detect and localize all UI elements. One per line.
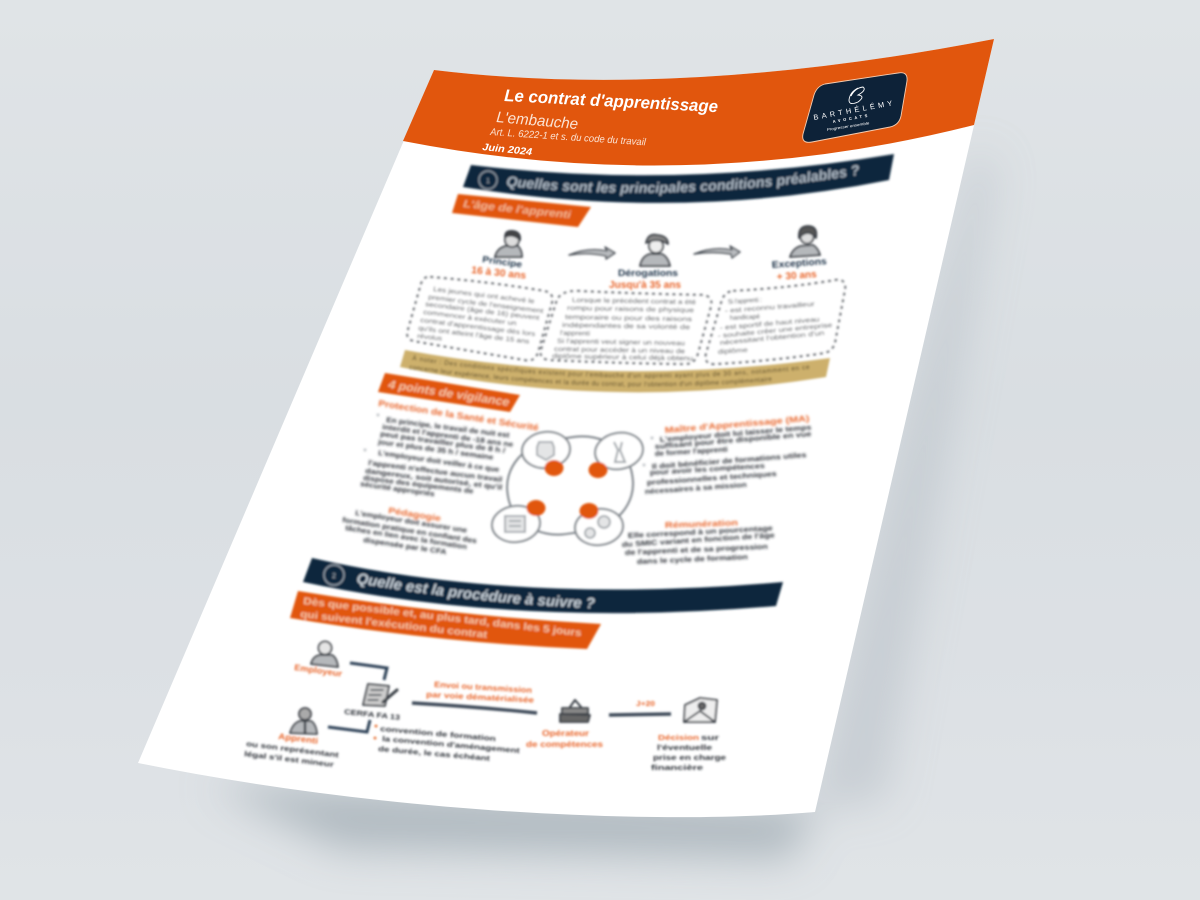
pedagogy text: L'employeur doit assurer une xyxy=(355,508,468,535)
master text xyxy=(643,423,812,496)
box principe: contrat d'apprentissage dès lors xyxy=(420,317,537,338)
box exceptions: - est sportif de haut niveau xyxy=(720,316,820,332)
range to 35: Jusqu'à 35 ans xyxy=(609,280,681,291)
subtitle: L'embauche xyxy=(496,109,579,133)
pay text: Elle correspond à un pourcentage xyxy=(628,523,773,540)
tag: deadline: qui suivent l'exécution du contrat xyxy=(300,609,489,641)
box principe: premier cycle de l'enseignement xyxy=(428,294,544,315)
box derogations: diplôme supérieur à celui déjà obtenu xyxy=(552,353,693,362)
pay text: dans le cycle de formation xyxy=(637,552,748,566)
section 2 number xyxy=(324,565,344,585)
bullet text 1: interdit et l'apprenti de -18 ans ne xyxy=(382,422,514,449)
master text: de former l'apprenti xyxy=(655,445,728,458)
arrow 2 xyxy=(694,246,740,258)
box exceptions: Si l'apprenti : xyxy=(728,297,762,306)
decision text: financière xyxy=(651,763,703,772)
apprentice note xyxy=(244,739,340,769)
decision text: Décision xyxy=(658,733,699,742)
box derogations: temporaire ou pour des raisons xyxy=(565,314,693,323)
label: transmission: Envoi ou transmission xyxy=(434,680,532,695)
age section: people and labels xyxy=(471,226,827,291)
apprentice note: légal s'il est mineur xyxy=(244,749,334,769)
gold note band: À noter : Des conditions spécifiques existent pour l'embauche d'un apprenti ayant plus de 30 ans, notamment en ce qui xyxy=(412,354,810,380)
box exceptions: handicapé xyxy=(730,313,760,322)
apprentice note: ou son représentant xyxy=(246,739,340,759)
label exceptions: Exceptions xyxy=(771,256,827,271)
pay text: de l'apprenti et de sa progression xyxy=(625,542,768,557)
icon: person principe xyxy=(495,231,522,257)
box derogations: Lorsque le précédent contrat a été xyxy=(572,297,696,306)
icon: operator xyxy=(560,700,590,722)
label: operator: Opérateur xyxy=(542,729,589,738)
logo name: BARTHÉLÉMY xyxy=(813,99,893,122)
master text: L'employeur doit lui laisser le temps xyxy=(659,423,812,444)
bullet text 1: peut pas travailler plus de 8 h / xyxy=(380,429,506,455)
page shadow xyxy=(210,150,995,858)
bullet text 1: En principe, le travail de nuit est xyxy=(386,415,511,440)
section 2 number: 2 xyxy=(332,573,336,580)
circle: health xyxy=(520,430,572,476)
pedagogy text: tâches en lien avec la formation xyxy=(345,523,468,551)
box exceptions: - souhaite créer une entreprise xyxy=(718,322,833,340)
box principe: commencer à exécuter un xyxy=(423,309,517,327)
arrow line: to decision xyxy=(609,714,671,715)
bullet text 2: dangereux, soit autorisé, et qu'il xyxy=(365,466,503,492)
box derogations: indépendantes de sa volonté de xyxy=(562,322,691,331)
box exceptions: nécessitant l'obtention d'un xyxy=(720,330,825,347)
box derogations: contrat pour accéder à un niveau de xyxy=(554,346,685,355)
bullet text 1: jour et plus de 35 h / semaine xyxy=(377,437,494,462)
heading: master: Maître d'Apprentissage (MA) xyxy=(664,413,810,435)
connector: apprentice to form xyxy=(328,720,370,732)
heading: pedagogy: Pédagogie xyxy=(388,505,442,523)
legal reference: Art. L. 6222-1 et s. du code du travail xyxy=(489,127,647,148)
age section: dashed boxes xyxy=(407,277,845,364)
box derogations: Si l'apprenti veut signer un nouveau xyxy=(557,338,685,347)
connector: employer to form xyxy=(350,663,387,680)
documents list: de durée, le cas échéant xyxy=(378,744,491,763)
tag: deadline: Dès que possible et, au plus tard, dans les 5 jours xyxy=(303,596,583,639)
pedagogy text: formation pratique en confiant des xyxy=(342,515,477,545)
box principe xyxy=(407,277,552,360)
label: employer: Employeur xyxy=(294,662,343,679)
master text: Il doit bénéficier de formations utiles xyxy=(651,450,807,471)
document sheet xyxy=(138,39,994,817)
master text: professionnelles et techniques xyxy=(647,469,777,487)
decision text xyxy=(651,733,726,772)
documents list xyxy=(374,724,521,763)
section 1 question: Quelles sont les principales conditions préalables ? xyxy=(504,163,861,198)
bullet text 2: L'employeur doit veiller à ce que xyxy=(378,448,500,474)
documents list: la convention d'aménagement xyxy=(382,734,521,755)
date: Juin 2024 xyxy=(482,142,533,158)
label: transmission: par voie dématérialisée xyxy=(426,690,535,705)
circle: master xyxy=(588,429,646,478)
logo tagline: Progresser ensemble xyxy=(827,121,870,132)
master text: nécessaires à sa mission xyxy=(645,480,747,496)
icon: form xyxy=(363,684,397,706)
pay text: du SMIC variant en fonction de l'âge xyxy=(622,530,775,549)
label: operator xyxy=(526,729,604,749)
bullet text 2: sécurité appropriés xyxy=(360,479,435,498)
pedagogy text: dispensée par le CFA xyxy=(363,535,447,556)
heading: pay: Rémunération xyxy=(665,517,738,530)
label principe: Principe xyxy=(482,254,523,270)
decision text: l'éventuelle xyxy=(657,743,712,752)
range over 30: + 30 ans xyxy=(776,269,818,283)
box exceptions: diplôme xyxy=(718,347,748,356)
label: transmission xyxy=(426,680,535,705)
box exceptions xyxy=(706,280,845,364)
tag: vigilance: 4 points de vigilance xyxy=(386,379,511,409)
pedagogy text xyxy=(342,508,477,556)
box principe: qu'ils ont atteint l'âge de 15 ans xyxy=(418,325,531,346)
master text: suffisant pour être disponible en vue xyxy=(654,429,812,451)
four points ring diagram xyxy=(490,429,646,547)
logo subtitle: AVOCATS xyxy=(832,113,868,124)
tag: deadline xyxy=(290,591,601,649)
label derogations: Dérogations xyxy=(618,268,678,279)
section 1 heading bar xyxy=(462,152,896,205)
procedure flow xyxy=(244,642,726,772)
icon: person exceptions xyxy=(790,226,820,257)
section number: 1 xyxy=(486,178,490,185)
icon: employer xyxy=(311,642,338,667)
section 2 question: Quelle est la procédure à suivre ? xyxy=(355,571,597,610)
logo monogram xyxy=(849,87,864,104)
bullet text 2 xyxy=(360,448,503,498)
title: Le contrat d'apprentissage xyxy=(504,86,718,116)
vigilance left column xyxy=(342,398,539,556)
box derogations xyxy=(541,291,711,364)
pay text xyxy=(622,523,775,566)
icon: person derogations xyxy=(640,235,670,266)
arrow line: to operator xyxy=(412,703,537,713)
vigilance right column xyxy=(622,413,812,566)
gold note band xyxy=(398,348,832,394)
range 16-30: 16 à 30 ans xyxy=(471,265,527,282)
label: apprentice: Apprenti xyxy=(278,731,319,746)
decision text: sur xyxy=(701,733,719,742)
box principe: révolus xyxy=(417,333,443,343)
tag: age xyxy=(452,194,591,227)
decision text: prise en charge xyxy=(653,753,726,762)
box derogations: rompu pour raisons de physique xyxy=(567,305,695,314)
master text: pour avoir les compétences xyxy=(650,461,765,477)
heading: health and safety: Protection de la Santé et Sécurité xyxy=(378,398,539,433)
label: operator: de compétences xyxy=(526,740,604,749)
tag: vigilance xyxy=(378,373,520,412)
box principe: Les jeunes qui ont achevé le xyxy=(433,286,535,305)
icon: envelope xyxy=(684,698,717,722)
documents list: convention de formation xyxy=(380,724,496,743)
label: delay: J+20 xyxy=(636,699,655,708)
bullet text 1 xyxy=(377,414,514,462)
circle: pedagogy xyxy=(490,500,546,544)
section number xyxy=(479,171,497,189)
bullet text 2: dispose des équipements de xyxy=(363,473,474,496)
orange header xyxy=(403,39,994,166)
gold note band: concerne leur expérience, leurs compétences et la durée du contrat, pour l'obtention d'un diplôme complémentaire xyxy=(408,365,772,388)
tag: age: L'âge de l'apprenti xyxy=(463,198,573,221)
box principe: secondaire (âge de 16) peuvent xyxy=(425,301,540,322)
logo xyxy=(803,73,907,142)
box exceptions: - est reconnu travailleur xyxy=(725,301,816,315)
bullet text 2: l'apprenti n'effectue aucun travail xyxy=(368,458,503,484)
icon: apprentice xyxy=(290,708,317,734)
section 2 heading bar xyxy=(302,556,784,615)
arrow 1 xyxy=(569,247,615,259)
label: form: CERFA FA 13 xyxy=(344,707,400,722)
box derogations: l'apprenti xyxy=(560,330,591,338)
circle: pay xyxy=(573,503,625,547)
